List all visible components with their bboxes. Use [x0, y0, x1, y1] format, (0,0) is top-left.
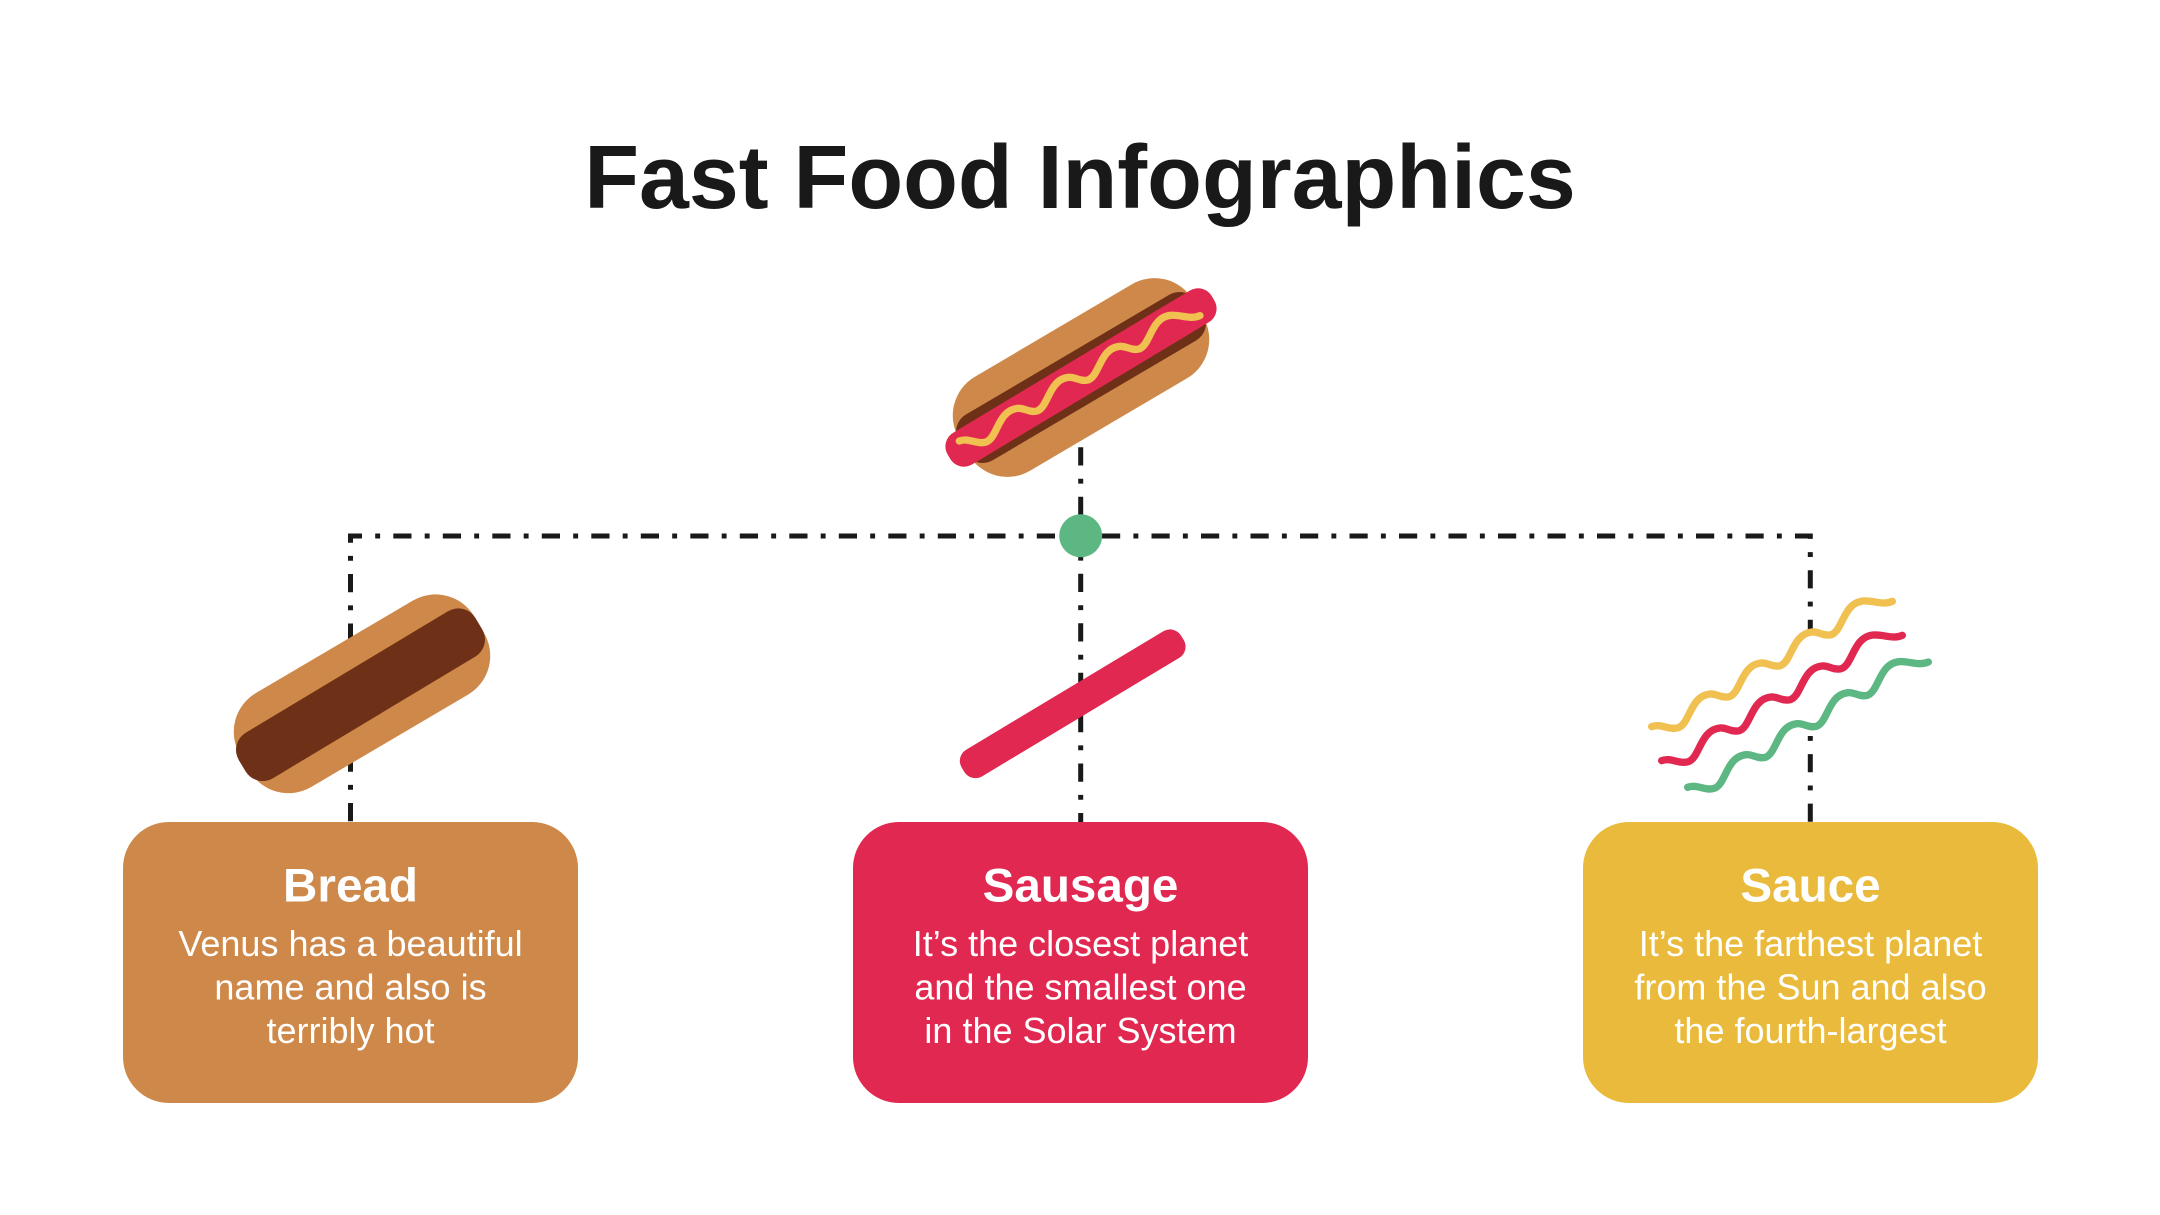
text block: bread description: Venus has a beautiful — [178, 923, 523, 964]
heading: bread: Bread — [283, 860, 418, 912]
text block: sauce description: It’s the farthest planet — [1639, 923, 1982, 964]
panel: bread — [123, 822, 578, 1103]
heading: sausage: Sausage — [983, 860, 1178, 912]
sauce line: mustard — [1652, 601, 1892, 728]
panel: sausage — [853, 822, 1308, 1103]
icon: bread bun — [217, 578, 507, 810]
text block: sauce description: from the Sun and also — [1634, 966, 1987, 1008]
text block: sausage description: in the Solar System — [924, 1010, 1237, 1051]
text block: bread description: terribly hot — [266, 1010, 435, 1051]
panel: sauce — [1583, 822, 2038, 1103]
title: Fast Food Infographics — [584, 128, 1576, 228]
heading: sauce: Sauce — [1740, 860, 1881, 912]
icon: whole hot dog — [936, 262, 1226, 493]
junction dot — [1059, 514, 1102, 557]
dash-dot connector tree — [350, 447, 1810, 822]
text block: bread description — [178, 923, 523, 1051]
text block: sausage description: It’s the closest planet — [913, 923, 1248, 964]
sauce line: ketchup — [1662, 635, 1902, 762]
text block: bread description: name and also is — [214, 966, 487, 1008]
text block: sauce description: the fourth-largest — [1674, 1010, 1947, 1051]
text block: sausage description — [913, 923, 1248, 1051]
sauce line: relish — [1688, 662, 1928, 789]
icon: sauce squiggles — [1652, 601, 1928, 789]
icon: sausage — [955, 625, 1190, 783]
text block: sauce description — [1634, 923, 1987, 1051]
text block: sausage description: and the smallest one — [914, 966, 1247, 1008]
